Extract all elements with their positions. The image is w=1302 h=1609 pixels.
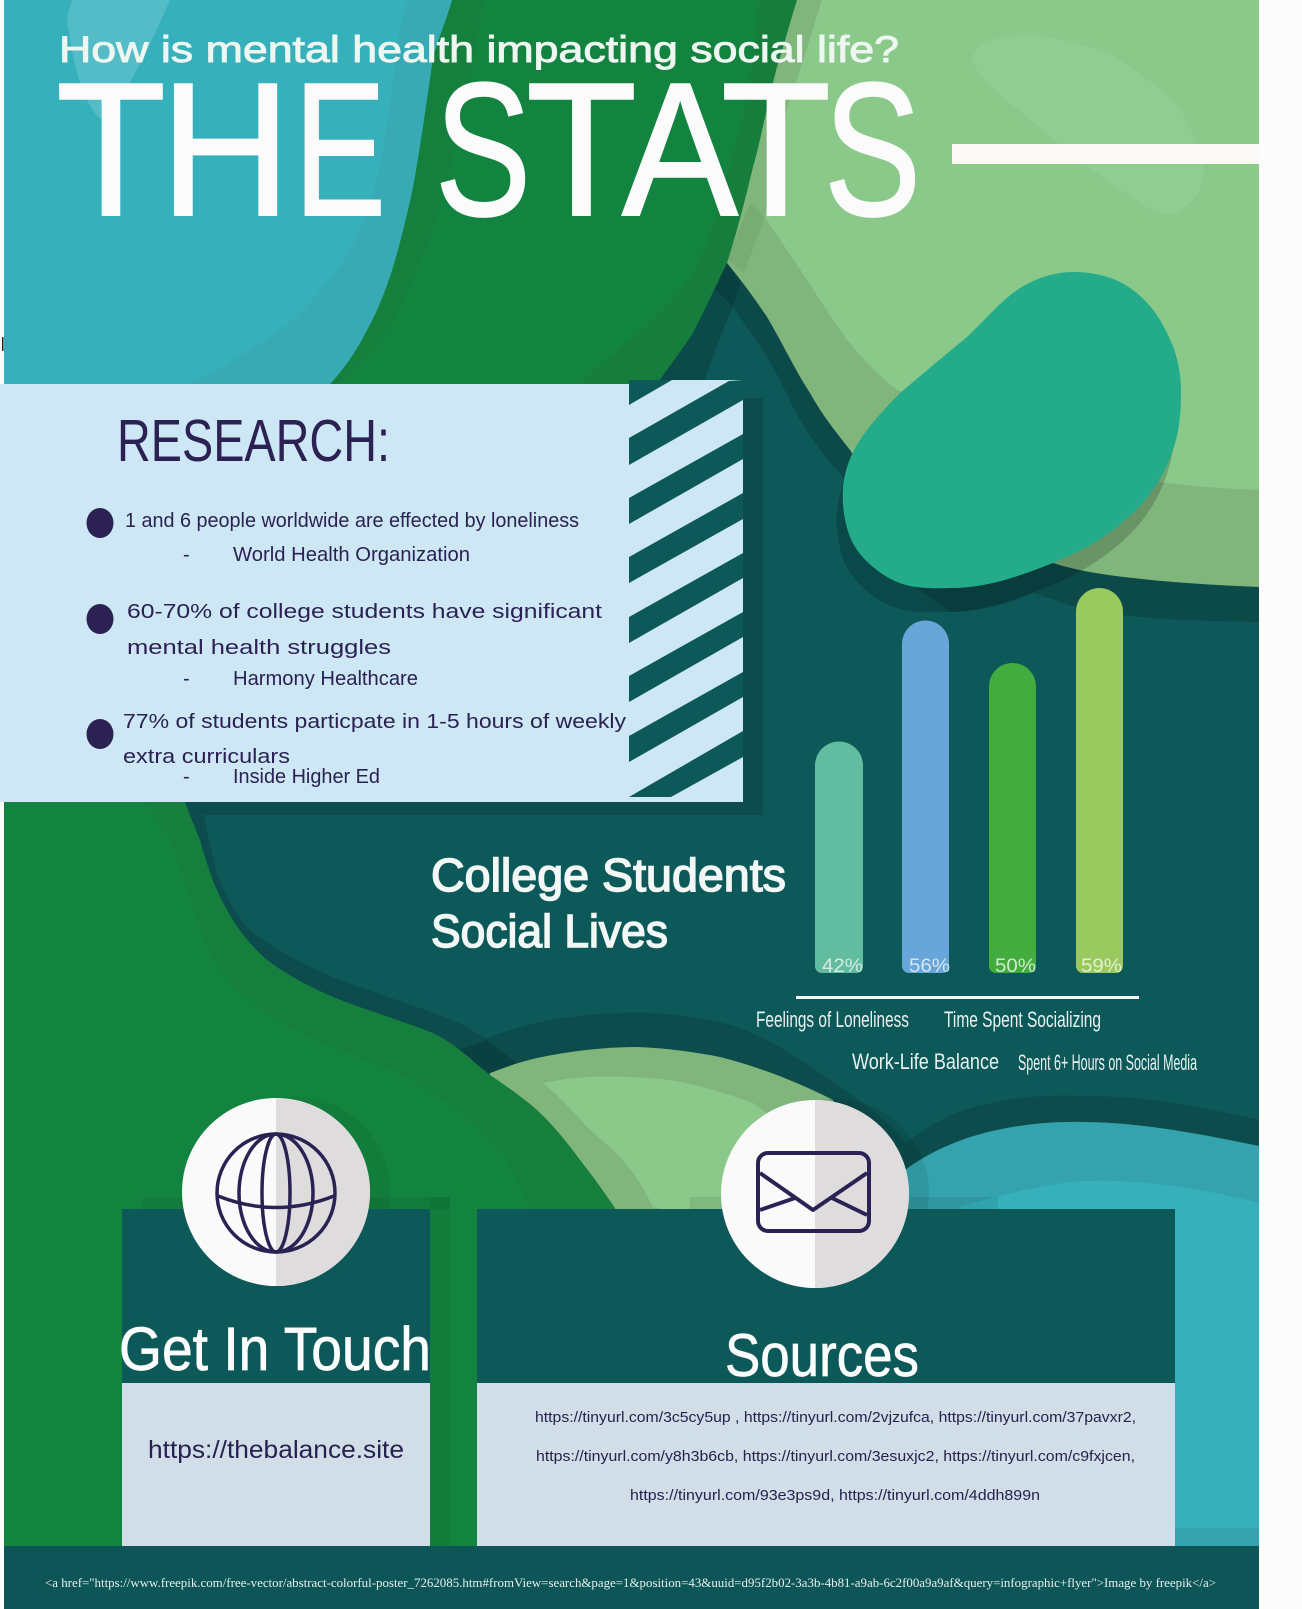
label: work-life balance: Work-Life Balance [852,1049,999,1074]
fact: mental health struggles: mental health struggles [127,637,391,659]
fact: loneliness: 1 and 6 people worldwide are effected by loneliness [125,510,579,532]
source: WHO: World Health Organization [233,544,470,566]
title: H [160,44,291,256]
title: A [622,44,738,256]
bar: time spent socializing [902,620,949,973]
heading: college students social lives: College Students [431,849,786,901]
source: Harmony Healthcare: Harmony Healthcare [233,668,418,690]
label: time spent socializing: Time Spent Socializing [944,1007,1101,1032]
panel: research [0,380,763,815]
card: get in touch [119,1209,431,1546]
website link: https://thebalance.site [148,1436,404,1464]
bullet 2 [86,604,114,634]
icon: globe [182,1098,370,1286]
subtitle: How is mental health impacting social life? [59,29,899,70]
heading: sources: Sources [725,1322,919,1389]
bar: work-life balance [989,663,1036,973]
bullet 1 [86,508,114,538]
value: 59%: 59% [1081,956,1122,977]
title rule [952,144,1259,164]
value: 56%: 56% [909,956,950,977]
source: Harmony Healthcare: - [183,668,190,690]
fact: extra curriculars: 77% of students particpate in 1-5 hours of weekly [123,711,626,733]
card: sources [477,1209,1175,1546]
title: T [526,44,637,256]
bar chart [756,588,1197,1075]
title: E [294,44,386,256]
bar: social media [1076,588,1123,973]
label: feelings of loneliness: Feelings of Loneliness [756,1007,909,1032]
footer band [4,1546,1259,1609]
source: Inside Higher Ed: Inside Higher Ed [233,766,380,788]
title: S [824,44,921,256]
attribution text: <a href="https://www.freepik.com/free-vector/abstract-colorful-poster_7262085.htm#fromView=search&page=1&position=43&uuid=d95f2b02-3a3b-4b81-a9ab-6c2f00a9a9af&query=infographic+flyer">Image by freepik</a> [45,1575,1216,1590]
value: 42%: 42% [822,956,863,977]
heading: research: RESEARCH: [117,408,390,474]
source links: https://tinyurl.com/y8h3b6cb, https://tinyurl.com/3esuxjc2, https://tinyurl.com/c9fxjcen, [536,1448,1135,1465]
title: S [435,44,531,256]
axis line [796,996,1139,999]
source: WHO: - [183,544,190,566]
source links: https://tinyurl.com/3c5cy5up , https://tinyurl.com/2vjzufca, https://tinyurl.com/37pavxr2, [535,1409,1136,1426]
heading: get in touch: Get In Touch [119,1315,431,1383]
source: Inside Higher Ed: - [183,766,190,788]
value: 50%: 50% [995,956,1036,977]
fact: extra curriculars: extra curriculars [123,746,290,768]
accent blob with shadow [837,272,1181,612]
title: T [56,44,166,256]
bar: feelings of loneliness [815,742,863,973]
source links: https://tinyurl.com/93e3ps9d, https://tinyurl.com/4ddh899n [630,1487,1040,1504]
icon: envelope [721,1100,909,1288]
decorative stripes [629,380,743,797]
title: T [721,44,831,256]
fact: mental health struggles: 60-70% of college students have significant [127,601,603,623]
heading: college students social lives: Social Lives [431,905,668,957]
bullet 3 [86,719,114,749]
